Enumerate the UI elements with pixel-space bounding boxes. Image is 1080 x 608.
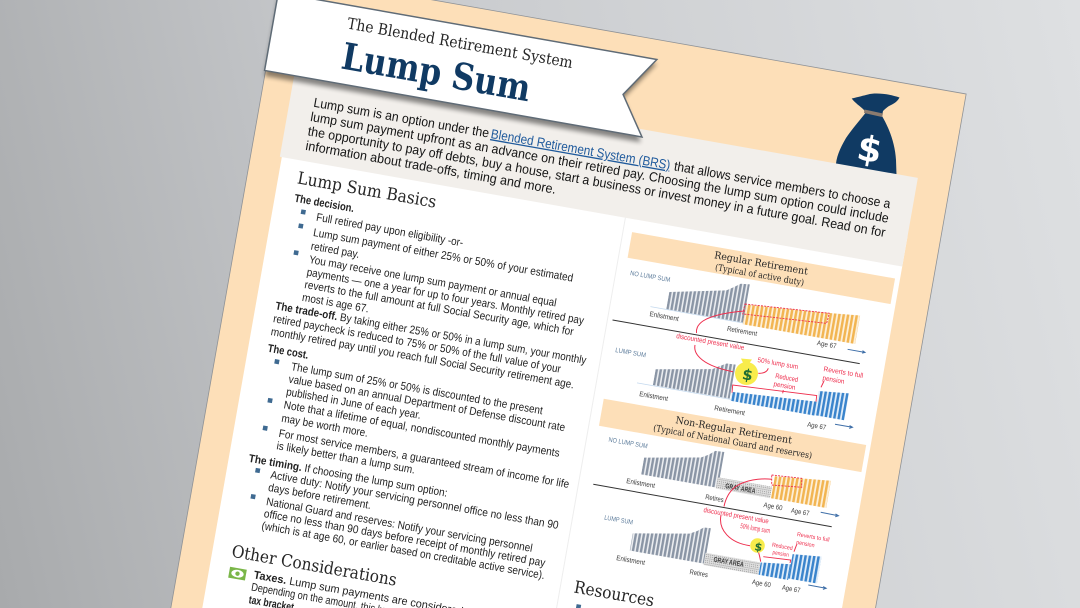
icon: yellow money bag: [735, 358, 758, 385]
intro paragraph: information about trade-offs, timing and more.: [305, 138, 557, 197]
annotations: non-regular retirement: discounted present value: [703, 507, 769, 525]
chart: no lump sum: GRAY AREA: [725, 483, 756, 495]
the decision: retired pay.: [310, 241, 360, 261]
the timing: [237, 453, 562, 583]
the cost: For most service members, a guaranteed stream of income for life: [278, 428, 570, 491]
title banner: [264, 0, 657, 143]
the timing: The timing. If choosing the lump sum option:: [248, 453, 448, 500]
icon: yellow money bag: $: [741, 365, 754, 385]
right column divider: [542, 218, 626, 608]
chart: no lump sum: Retirement: [726, 326, 758, 338]
resources bullet: [576, 604, 581, 608]
band subtitle: (Typical of active duty): [714, 262, 805, 289]
chart: no lump sum: Enlistment: [649, 311, 679, 323]
the timing: Active duty: Notify your servicing personnel office no less than 90: [269, 469, 559, 532]
panel background: [280, 68, 918, 267]
chart: no lump sum: NO LUMP SUM: [608, 437, 648, 450]
the cost: is likely better than a lump sum.: [276, 440, 416, 477]
banner subtitle: The Blended Retirement System: [346, 15, 574, 72]
heading band: [599, 399, 866, 472]
annotations: non-regular retirement: pension: [796, 540, 815, 549]
icon: money bag: [836, 94, 900, 190]
annotations: regular retirement: 50% lump sum: [757, 357, 799, 371]
annotations: non-regular retirement: 50% lump sum: [740, 523, 771, 535]
banner title: Lump Sum: [338, 34, 534, 110]
the cost: published in June of each year.: [285, 386, 422, 422]
heading: Lump Sum Basics: [296, 169, 438, 213]
the timing: (which is at age 60, or earlier based on creditable active service).: [261, 520, 546, 582]
intro paragraph: the opportunity to pay off debts, buy a house, start a business or invest money in a future goal. Read on for: [307, 123, 887, 240]
the cost: value based on an annual Department of Defense discount rate: [288, 374, 566, 434]
the trade-off: retired paycheck is reduced to 75% or 50% of the full value of your: [272, 313, 562, 376]
divider line: [593, 484, 832, 527]
annotations: non-regular retirement: Reduced: [771, 543, 793, 552]
chart: lump sum: Enlistment: [639, 391, 668, 403]
banner shadow: [265, 0, 657, 143]
other considerations: [223, 542, 550, 608]
document page: [157, 0, 966, 608]
chart: lump sum: LUMP SUM: [615, 347, 646, 359]
chart: lump sum: LUMP SUM: [604, 515, 633, 527]
annotations: regular retirement: Reverts to full: [823, 366, 864, 380]
the trade-off: The trade-off. By taking either 25% or 50% in a lump sum, your monthly: [274, 300, 588, 367]
annotations: regular retirement: pension: [822, 375, 845, 386]
chart: no lump sum: Age 67: [816, 340, 837, 350]
annotations: regular retirement: [676, 311, 864, 402]
heading: Other Considerations: [230, 542, 398, 591]
annotations: non-regular retirement: pension: [772, 550, 789, 559]
intro paragraph: that allows service members to choose a: [673, 158, 892, 211]
panel: regular retirement: [594, 231, 895, 471]
the decision: reverts to the full amount at full Social Security age, which for: [303, 279, 575, 338]
page background: [158, 0, 966, 608]
content area: [188, 127, 908, 608]
the timing: National Guard and reserves: Notify your servicing personnel: [265, 496, 533, 555]
the decision: Lump sum payment of either 25% or 50% of your estimated: [312, 227, 574, 285]
chart: no lump sum: NO LUMP SUM: [630, 270, 671, 284]
chart: no lump sum: Age 60: [763, 502, 783, 512]
chart: lump sum: Age 67: [781, 585, 801, 595]
annotations: non-regular retirement: Reverts to full: [796, 532, 830, 544]
icon: money bag: $: [854, 128, 885, 172]
chart: lump sum: Retires: [689, 569, 709, 579]
chart: lump sum: [590, 477, 840, 608]
the decision: Full retired pay upon eligibility -or-: [315, 212, 464, 249]
left column: lump sum basics: [236, 169, 615, 583]
chart: lump sum: Enlistment: [616, 555, 645, 567]
annotations: regular retirement: pension: [773, 381, 796, 392]
the decision: most is age 67.: [301, 292, 370, 315]
intro panel: [280, 68, 918, 267]
annotations: non-regular retirement: [703, 479, 830, 563]
banner ribbon: [265, 0, 657, 137]
chart: lump sum: Age 60: [751, 579, 771, 589]
the decision: payments — one a year for up to four years. Monthly retired pay: [306, 267, 585, 327]
intro paragraph: lump sum payment upfront as an advance on their retired pay. Choosing the lump sum option could include: [309, 109, 890, 226]
divider line: [613, 320, 860, 364]
intro paragraph: Lump sum is an option under the: [313, 95, 490, 141]
the cost: [250, 343, 584, 503]
the decision: You may receive one lump sum payment or annual equal: [308, 254, 557, 309]
band title: Non-Regular Retirement: [675, 415, 793, 447]
icon: yellow money bag: $: [753, 540, 763, 554]
chart: lump sum: Age 67: [807, 422, 827, 432]
intro paragraph: Blended Retirement System (BRS): [490, 126, 672, 173]
annotations: regular retirement: Reduced: [775, 373, 799, 384]
heading band: [628, 232, 895, 304]
the decision: The decision.: [293, 193, 355, 215]
the decision: [277, 193, 597, 353]
the cost: The lump sum of 25% or 50% is discounted to the present: [290, 361, 544, 417]
the timing: days before retirement.: [267, 482, 372, 512]
band title: Regular Retirement: [713, 250, 809, 278]
chart: no lump sum: Enlistment: [626, 478, 655, 490]
chart: no lump sum: Age 67: [790, 508, 810, 518]
chart: no lump sum: [594, 397, 852, 557]
chart: no lump sum: Retires: [705, 494, 724, 504]
chart: lump sum: Retirement: [714, 405, 745, 417]
chart: lump sum: GRAY AREA: [713, 557, 744, 569]
the timing: office no less than 90 days before receipt of monthly retired pay: [263, 508, 547, 570]
band subtitle: (Typical of National Guard and reserves): [652, 423, 813, 462]
annotations: regular retirement: discounted present value: [676, 333, 745, 352]
the cost: may be worth more.: [280, 413, 369, 440]
panel: non-regular retirement: [570, 395, 867, 608]
chart: lump sum: [602, 344, 860, 468]
icon: green bill: [228, 567, 247, 581]
the trade-off: monthly retired pay until you reach full Social Security retirement age.: [270, 326, 575, 391]
chart: no lump sum: [623, 264, 873, 357]
the cost: The cost.: [267, 343, 309, 362]
the cost: Note that a lifetime of equal, nondiscounted monthly payments: [283, 399, 561, 460]
